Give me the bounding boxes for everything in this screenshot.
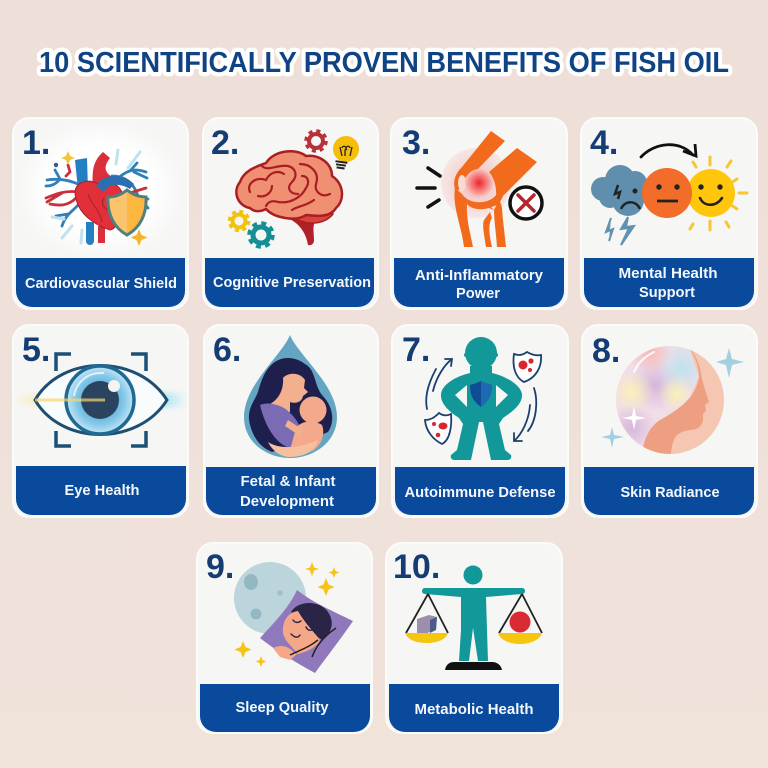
banner: cognitive preservation: [205, 258, 374, 307]
icon: mother and baby in drop: [244, 335, 337, 458]
panel: fetal and infant development: [204, 325, 378, 517]
banner: cardiovascular shield: [16, 258, 185, 307]
banner: skin radiance: Skin Radiance: [620, 485, 720, 501]
panel: metabolic health: [386, 543, 562, 733]
banner: mental health support: Mental Health: [618, 266, 718, 282]
number 10: 10.: [393, 548, 440, 586]
icon: glowing skin sphere with profile: [601, 346, 744, 454]
number 8: 8.: [592, 332, 620, 370]
banner: autoimmune defense: Autoimmune Defense: [404, 485, 556, 501]
number 3: 3.: [402, 124, 430, 162]
icon: eye with scan frame: [15, 354, 188, 446]
number 9: 9.: [206, 548, 234, 586]
panel: skin radiance: [582, 325, 757, 517]
banner: anti-inflammatory power: Anti-Inflammatory: [415, 268, 543, 284]
banner: mental health support: Support: [639, 285, 695, 301]
number 5: 5.: [22, 331, 50, 369]
icon: inflamed knee: [417, 131, 542, 247]
banner: anti-inflammatory power: [394, 258, 564, 307]
icon: sleeping person with moon: [234, 562, 353, 673]
icon: brain with gears and bulb: [230, 131, 359, 247]
banner: fetal and infant development: [206, 467, 376, 515]
panel: autoimmune defense: [392, 325, 568, 517]
panel: eye health: [13, 325, 188, 517]
icon: immune figure with shields: [425, 337, 541, 460]
number 1: 1.: [22, 124, 50, 162]
title: 10 SCIENTIFICALLY PROVEN BENEFITS OF FISH OIL: [39, 47, 729, 79]
banner: eye health: Eye Health: [64, 483, 140, 499]
banner: anti-inflammatory power: Power: [456, 286, 500, 302]
banner: fetal and infant development: Development: [240, 494, 334, 510]
panel: cognitive preservation: [203, 118, 378, 309]
panel: mental health support: [581, 118, 757, 309]
number 2: 2.: [211, 124, 239, 162]
icon: balance scale figure: [405, 566, 542, 670]
banner: metabolic health: Metabolic Health: [414, 702, 534, 718]
icon: heart with shield: [46, 150, 148, 246]
banner: cardiovascular shield: Cardiovascular Shield: [25, 276, 177, 292]
banner: autoimmune defense: [395, 467, 565, 515]
number 4: 4.: [590, 124, 618, 162]
banner: cognitive preservation: Cognitive Preservation: [213, 275, 371, 291]
banner: fetal and infant development: Fetal & Infant: [240, 474, 336, 490]
panel: anti-inflammatory power: [391, 118, 567, 309]
banner: metabolic health: [389, 684, 559, 732]
banner: eye health: [16, 466, 186, 515]
panel: sleep quality: [197, 543, 372, 733]
banner: sleep quality: [200, 684, 370, 732]
banner: skin radiance: [584, 467, 754, 515]
banner: mental health support: [584, 258, 754, 307]
icon: mood transition: [591, 144, 747, 245]
number 7: 7.: [402, 331, 430, 369]
banner: sleep quality: Sleep Quality: [236, 700, 328, 716]
panel: cardiovascular shield: [13, 118, 188, 309]
number 6: 6.: [213, 331, 241, 369]
